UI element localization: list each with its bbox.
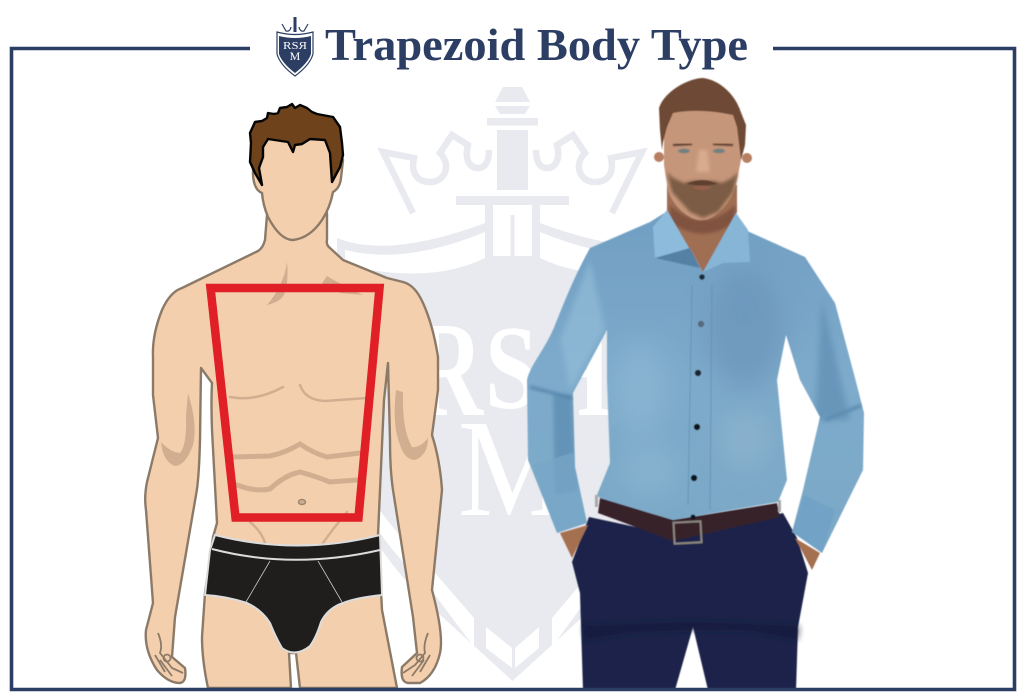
- logo sword and crown: [282, 17, 308, 32]
- watermark centre panel: [493, 205, 532, 256]
- nose: [696, 150, 710, 172]
- background watermark: shield logo: [337, 87, 688, 681]
- navel: [298, 500, 306, 504]
- logo monogram: RSЯ: [283, 40, 308, 52]
- shirt: [527, 210, 864, 553]
- moustache and mouth: [686, 180, 718, 190]
- muscle shading: [161, 262, 428, 466]
- collar: [653, 210, 703, 272]
- hair: [250, 104, 343, 185]
- watermark white band right: [540, 232, 680, 647]
- abdominal lines: [230, 385, 367, 543]
- shirt placket: [688, 285, 712, 510]
- photo-style man in blue shirt: [527, 78, 864, 690]
- watermark blade line: [510, 215, 514, 256]
- logo shield: [277, 32, 313, 76]
- illustrated male figure: [145, 104, 442, 688]
- shirt shading: [530, 260, 862, 553]
- watermark monogram: R: [415, 295, 484, 445]
- watermark monogram: M: [458, 392, 568, 546]
- logo: RSM shield: M: [290, 49, 301, 63]
- body silhouette: [145, 213, 442, 688]
- watermark monogram: Я: [543, 295, 611, 445]
- watermark bottom chevrons: [486, 627, 539, 668]
- hands in pockets: [560, 525, 820, 570]
- collar shadow: [655, 248, 700, 268]
- head: [253, 120, 343, 240]
- watermark monogram: S: [485, 301, 538, 434]
- hand details: [155, 633, 430, 676]
- hair: [659, 78, 746, 160]
- watermark sword: [456, 87, 569, 260]
- beard: [667, 172, 738, 218]
- logo: RSM shield: [277, 17, 313, 76]
- eyes and brows: [673, 144, 733, 153]
- trousers: [572, 513, 808, 690]
- belt: [595, 495, 781, 544]
- trouser shading: [583, 622, 800, 640]
- watermark white band left: [345, 232, 485, 647]
- watermark shield outline: [337, 223, 688, 681]
- neck: [667, 185, 737, 276]
- title: Trapezoid Body Type: [325, 20, 748, 70]
- underwear: [205, 535, 382, 653]
- watermark crown: [383, 135, 642, 213]
- face: [654, 78, 752, 220]
- shirt buttons: [690, 274, 705, 520]
- red trapezoid outline: [210, 288, 380, 518]
- watermark monogram: [415, 295, 611, 546]
- neck shadow: [670, 205, 735, 234]
